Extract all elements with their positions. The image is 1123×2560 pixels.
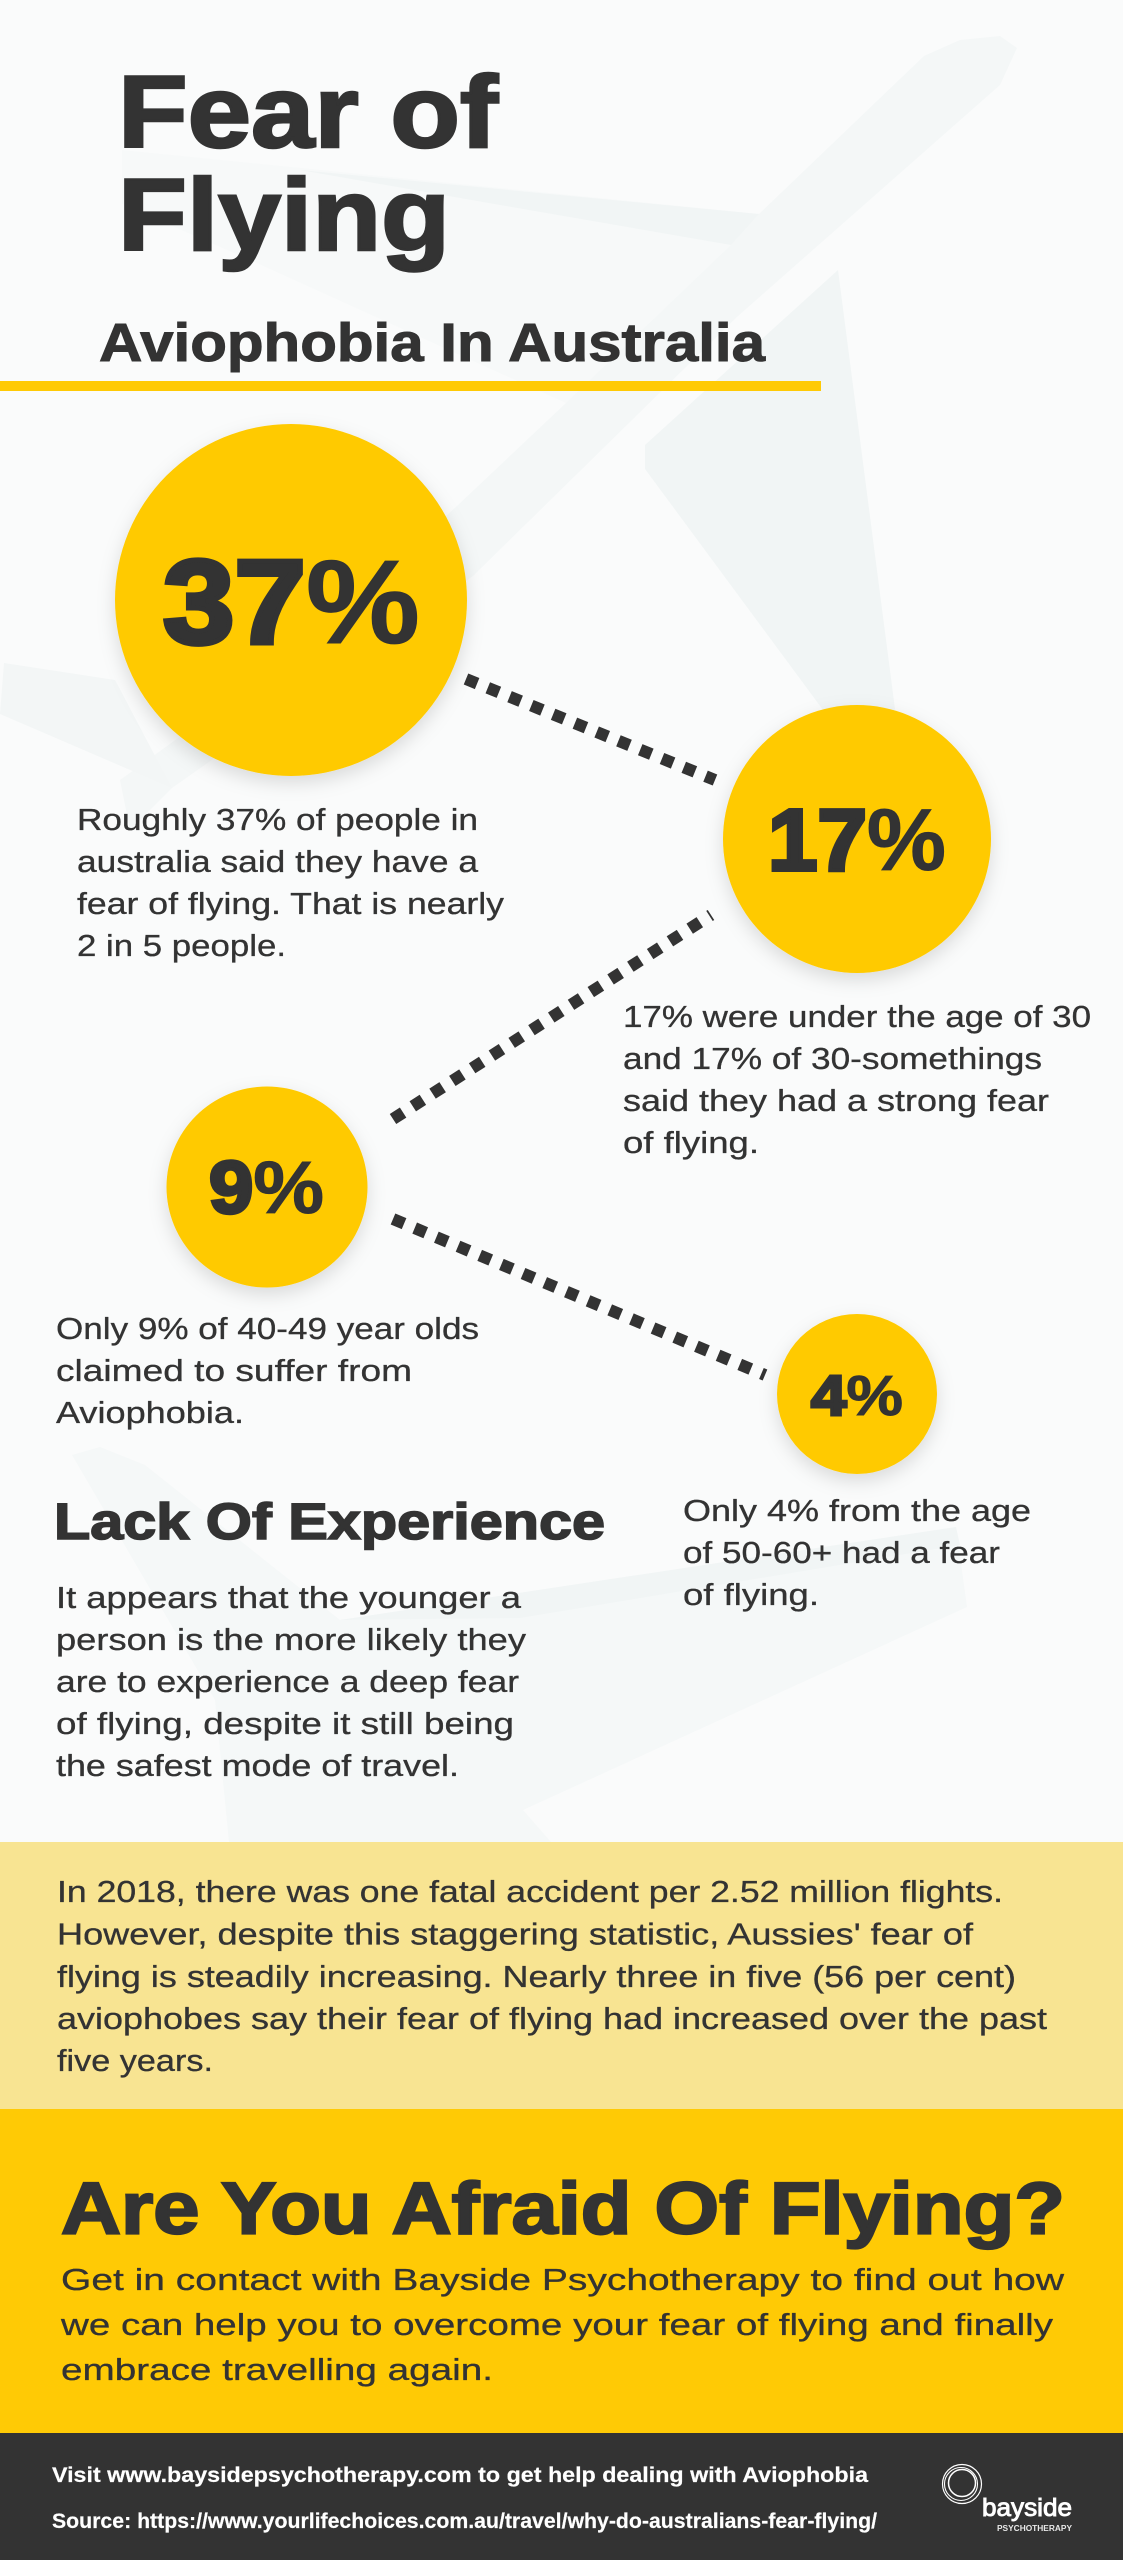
stat circle: 17% <box>723 705 991 973</box>
text: lack of experience body: the safest mode of travel. <box>56 1749 459 1783</box>
stat circle: 4% <box>777 1314 937 1474</box>
text: 17% description <box>623 1000 1091 1160</box>
text: lack of experience body: person is the more likely they <box>56 1623 527 1657</box>
text: 4% description: Only 4% from the age <box>683 1494 1031 1528</box>
text: 37% description: fear of flying. That is nearly <box>77 887 505 921</box>
stat circle: 4%: 4% <box>811 1364 903 1428</box>
text: lack of experience body <box>56 1581 527 1783</box>
panel: 2018 statistic: aviophobes say their fear of flying had increased over the past <box>57 2002 1048 2036</box>
dotted connector: 37% to 17% <box>466 679 715 780</box>
text: 9% description: claimed to suffer from <box>56 1354 412 1388</box>
yellow underline bar <box>0 381 821 391</box>
heading: Lack Of Experience: Lack Of Experience <box>54 1493 605 1550</box>
text: 4% description: of flying. <box>683 1578 819 1612</box>
stat circle: 37% <box>115 424 467 776</box>
background plane: top <box>0 36 1017 830</box>
text: 4% description: of 50-60+ had a fear <box>683 1536 1000 1570</box>
panel: call to action: Get in contact with Bayside Psychotherapy to find out how <box>61 2263 1065 2297</box>
text: 37% description <box>77 803 505 963</box>
subtitle: Aviophobia In Australia <box>99 313 766 373</box>
text: 37% description: 2 in 5 people. <box>77 929 286 963</box>
title <box>118 55 499 272</box>
text: 17% description: and 17% of 30-somethings <box>623 1042 1042 1076</box>
title: Fear of <box>118 55 499 169</box>
text: 9% description: Aviophobia. <box>56 1396 244 1430</box>
panel: call to action <box>0 2109 1123 2433</box>
stat circle: 37%: 37% <box>163 536 420 669</box>
text: 4% description <box>683 1494 1031 1612</box>
icon: bayside logo <box>942 2464 1073 2533</box>
panel: 2018 statistic: However, despite this staggering statistic, Aussies' fear of <box>57 1918 974 1952</box>
text: 37% description: australia said they have a <box>77 845 478 879</box>
text: 17% description: of flying. <box>623 1126 759 1160</box>
stat circle: 9%: 9% <box>209 1146 324 1229</box>
icon: bayside logo: PSYCHOTHERAPY <box>997 2524 1073 2533</box>
panel: call to action: we can help you to overcome your fear of flying and finally <box>60 2308 1054 2342</box>
panel: 2018 statistic: five years. <box>57 2044 213 2078</box>
panel: 2018 statistic: In 2018, there was one fatal accident per 2.52 million flights. <box>57 1875 1003 1909</box>
stat circle: 9% <box>166 1086 368 1288</box>
dotted connector: 17% to 9% <box>393 915 711 1119</box>
background plane: bottom <box>72 1447 967 1842</box>
stat circle: 17%: 17% <box>768 792 946 889</box>
panel: footer: Source: https://www.yourlifechoices.com.au/travel/why-do-australians-fear-flying/ <box>52 2510 877 2533</box>
panel: 2018 statistic <box>0 1842 1123 2109</box>
panel: 2018 statistic: flying is steadily increasing. Nearly three in five (56 per cent) <box>57 1960 1016 1994</box>
panel: footer: Visit www.baysidepsychotherapy.com to get help dealing with Aviophobia <box>52 2464 868 2487</box>
panel: call to action: Are You Afraid Of Flying? <box>61 2168 1065 2250</box>
text: lack of experience body: of flying, despite it still being <box>56 1707 514 1741</box>
text: 9% description: Only 9% of 40-49 year olds <box>56 1312 479 1346</box>
text: lack of experience body: are to experience a deep fear <box>56 1665 519 1699</box>
panel: footer <box>0 2433 1123 2560</box>
text: 17% description: said they had a strong fear <box>623 1084 1049 1118</box>
icon: bayside logo: bayside <box>982 2494 1072 2522</box>
text: 17% description: 17% were under the age of 30 <box>623 1000 1091 1034</box>
text: lack of experience body: It appears that the younger a <box>56 1581 521 1615</box>
panel: call to action: embrace travelling again. <box>61 2353 493 2387</box>
dotted connector: 9% to 4% <box>393 1219 765 1375</box>
text: 9% description <box>56 1312 479 1430</box>
page background <box>0 0 1123 1842</box>
title: Flying <box>118 158 450 272</box>
text: 37% description: Roughly 37% of people in <box>77 803 478 837</box>
